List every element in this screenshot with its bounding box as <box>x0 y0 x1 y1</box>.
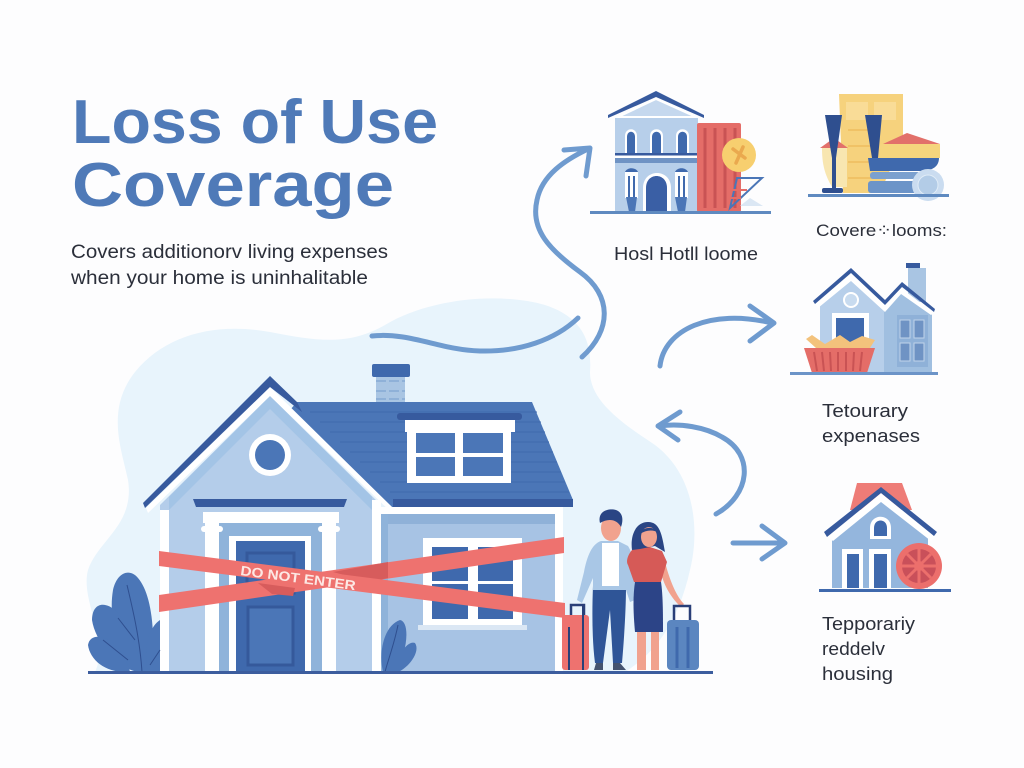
ground line <box>88 671 713 674</box>
hotel label: Hosl Hotll loome <box>614 244 758 264</box>
blue suitcase <box>667 606 699 670</box>
arrow: toward temporary expenses <box>660 306 774 366</box>
temporary rental housing label: Tepporariy <box>822 614 915 634</box>
title: Loss of Use <box>72 88 438 157</box>
icon: meals and dining <box>808 94 949 201</box>
arrow: toward temporary housing <box>733 526 785 559</box>
subtitle text: when your home is uninhalitable <box>70 268 368 289</box>
subtitle text: Covers additionorv living expenses <box>71 242 388 263</box>
do not enter label: DO NOT ENTER <box>240 563 357 593</box>
arrow: wave from house toward hotel <box>372 148 604 357</box>
subtitle text <box>70 242 388 289</box>
covered items label: Covere⁘looms: <box>816 221 947 240</box>
porch and columns <box>201 512 340 672</box>
right wing wall <box>381 507 563 672</box>
man <box>577 509 635 670</box>
temporary rental housing label: housing <box>822 664 893 684</box>
temporary rental housing label: reddelv <box>822 639 885 659</box>
left bush <box>88 573 160 672</box>
title <box>72 88 438 220</box>
front door <box>229 536 311 672</box>
round attic window <box>249 434 291 476</box>
dormer window <box>397 413 522 483</box>
background blob <box>87 298 694 672</box>
red suitcase <box>562 605 589 670</box>
small bush <box>381 620 417 672</box>
crossed caution tape <box>159 537 565 618</box>
couple with luggage <box>562 509 699 670</box>
main roof <box>290 402 573 507</box>
woman <box>627 522 684 670</box>
gable roof trim <box>143 376 392 513</box>
icon: house with basket <box>790 263 938 375</box>
gable front wall <box>160 396 381 672</box>
temporary expenses label <box>822 401 920 446</box>
arrow: curved back toward house <box>658 412 744 514</box>
porch lintel <box>193 499 347 507</box>
icon: small house with wheel <box>819 483 951 592</box>
title: Coverage <box>72 151 394 220</box>
main house illustration <box>88 364 573 672</box>
chimney <box>372 364 410 403</box>
temporary rental housing label <box>822 614 915 684</box>
icon: hotel building <box>590 91 771 214</box>
temporary expenses label: expenases <box>822 426 920 446</box>
right ground window <box>418 538 527 630</box>
temporary expenses label: Tetourary <box>822 401 908 421</box>
